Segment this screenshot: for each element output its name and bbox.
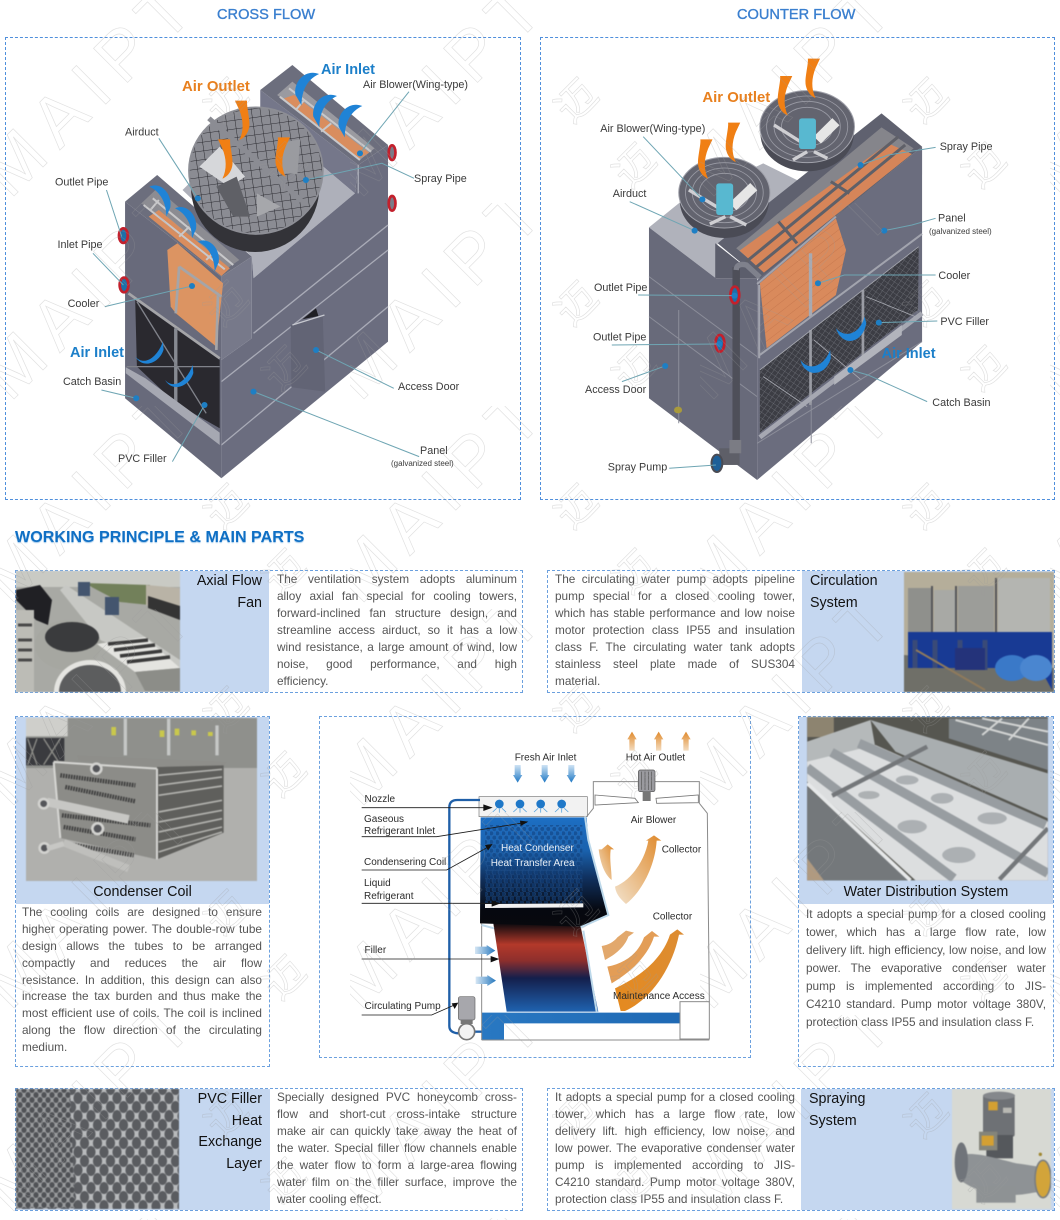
diagram: closed cooling tower cross-section — [362, 732, 710, 1040]
callout labels: counter flow: Airduct — [613, 188, 646, 200]
callout labels: cross flow: Catch Basin — [63, 376, 121, 388]
photo: axial flow fan — [15, 570, 181, 693]
text: circulation system: motor protection class IP55 and insulation — [555, 623, 795, 637]
panel: PVC filler heat exchange layer — [15, 1088, 523, 1211]
tower graphic — [362, 732, 709, 1040]
label background — [16, 1089, 270, 1210]
panel: condenser coil — [15, 716, 270, 1067]
text: circulation system: stainless steel plate made of SUS304 — [555, 657, 795, 671]
callout labels: cross flow: Panel — [420, 445, 448, 457]
callout labels: counter flow: Air Blower(Wing-type) — [600, 123, 705, 135]
text: axial flow fan — [277, 572, 517, 688]
diagram labels: Maintenance Access — [613, 991, 705, 1002]
callout labels: cross flow: Air Inlet — [321, 62, 375, 78]
tower body — [612, 59, 937, 480]
text: axial flow fan: streamline access airduct, so it has a low — [277, 623, 517, 637]
diagram labels: Liquid — [364, 878, 391, 889]
caption: circulation system: System — [810, 594, 858, 610]
caption: PVC filler: Heat — [232, 1112, 262, 1128]
text: water distribution system: It adopts a special pump for a closed cooling — [806, 907, 1046, 921]
text: spraying system: pump is implemented according to JIS- — [555, 1158, 795, 1172]
diagram labels: Circulating Pump — [364, 1001, 441, 1012]
text: spraying system — [555, 1090, 795, 1206]
callout labels: counter flow — [585, 90, 993, 474]
label background — [802, 571, 1054, 692]
diagram labels: Refrigerant — [364, 891, 414, 902]
text: PVC filler: water film on the filler surface, improve the — [277, 1175, 517, 1189]
text: axial flow fan: alloy axial fan special for cooling towers, — [277, 589, 517, 603]
panel: working principle diagram — [319, 716, 751, 1058]
text: axial flow fan: noise, good performance, and high — [277, 657, 517, 671]
text: spraying system: tower, which has a large flow rate, low — [555, 1107, 795, 1121]
text: PVC filler: flow and short-cut cross-intake structure — [277, 1107, 517, 1121]
diagram labels: Air Blower — [631, 815, 677, 826]
diagram labels: Hot Air Outlet — [626, 752, 685, 764]
caption: circulation system: Circulation — [810, 573, 878, 589]
text: circulation system: The circulating water pump adopts pipeline — [555, 572, 795, 586]
diagram labels: Gaseous — [364, 814, 404, 825]
callout labels: cross flow: PVC Filler — [118, 453, 167, 465]
caption: axial flow fan — [197, 573, 262, 610]
text: axial flow fan: efficiency. — [277, 674, 328, 688]
text: axial flow fan: The ventilation system adopts aluminum — [277, 572, 517, 586]
panel: spraying system — [547, 1088, 1055, 1211]
text: condenser coil: along the flow direction of the circulating — [22, 1023, 262, 1037]
text: spraying system: C4210 standard. Pump motor voltage 380V, — [555, 1175, 795, 1189]
caption: PVC filler — [198, 1091, 262, 1172]
callout labels: counter flow: Panel — [938, 212, 966, 224]
text: water distribution system: tower, which has a large flow rate, low — [806, 925, 1046, 939]
callout labels: cross flow: Access Door — [398, 381, 460, 393]
callout labels: cross flow: Outlet Pipe — [55, 176, 108, 188]
text: water distribution system: protection class IP55 and insulation class F. — [806, 1015, 1034, 1029]
text: condenser coil: medium. — [22, 1040, 67, 1054]
callout labels: counter flow: Outlet Pipe — [594, 282, 647, 294]
text: condenser coil: higher operating power. The double-row tube — [22, 922, 262, 936]
text: circulation system: class F. The circulating water tank adopts — [555, 640, 795, 654]
panel: axial flow fan — [15, 570, 523, 693]
label background — [801, 1089, 1054, 1210]
callout labels: cross flow: Spray Pipe — [414, 173, 467, 185]
panel: cross flow tower illustration — [55, 62, 468, 478]
text: condenser coil: design allows the tubes to be arranged — [22, 939, 262, 953]
text: water distribution system: power. The evaporative condenser water — [806, 961, 1046, 975]
text: PVC filler: the water. Special filler flow channels enable — [277, 1141, 517, 1155]
text: water distribution system: pump is implemented according to JIS- — [806, 979, 1046, 993]
text: axial flow fan: forward-inclined fan structure design, and — [277, 606, 517, 620]
photo: condenser coil — [25, 718, 258, 882]
panel: counter flow tower illustration — [585, 58, 993, 480]
text: spraying system: low power. The evaporative condenser water — [555, 1141, 795, 1155]
callout labels: counter flow: Spray Pump — [608, 462, 667, 474]
photo: PVC honeycomb filler — [15, 1088, 180, 1210]
text: condenser coil — [22, 905, 262, 1054]
callout labels: cross flow: (galvanized steel) — [391, 459, 454, 468]
callout labels: cross flow: Air Blower(Wing-type) — [363, 79, 468, 91]
text: circulation system: pump special for a closed cooling tower, — [555, 589, 795, 603]
text: condenser coil: The cooling coils are designed to ensure — [22, 905, 262, 919]
caption: water distribution system: Water Distribution System — [844, 884, 1008, 900]
text: water distribution system: C4210 standard. Pump motor voltage 380V, — [806, 997, 1046, 1011]
diagram labels: Fresh Air Inlet — [515, 752, 577, 764]
text: PVC filler: make air can quickly take away the heat of — [277, 1124, 517, 1138]
text: spraying system: It adopts a special pump for a closed cooling — [555, 1090, 795, 1104]
caption: spraying system: System — [809, 1112, 857, 1128]
diagram labels: Nozzle — [364, 794, 396, 805]
callout labels: counter flow: PVC Filler — [940, 316, 989, 328]
text: circulation system — [555, 572, 795, 688]
callout labels: counter flow: Access Door — [585, 384, 647, 396]
text: water distribution system: delivery lift. high efficiency, low noise, and low — [806, 943, 1046, 957]
callout labels: cross flow: Air Inlet — [70, 345, 124, 361]
panel: circulation system — [547, 570, 1055, 693]
tower body — [93, 65, 419, 478]
text: condenser coil: resistance. In addition, this design can also — [22, 973, 262, 987]
diagram labels: Filler — [364, 945, 387, 956]
text: circulation system: material. — [555, 674, 600, 688]
text: circulation system: which has stable performance and low noise — [555, 606, 795, 620]
diagram labels — [364, 752, 705, 1012]
callout labels: counter flow: Air Inlet — [882, 346, 936, 362]
callout labels: cross flow: Airduct — [125, 126, 159, 138]
callout labels: cross flow: Air Outlet — [182, 79, 250, 95]
text: condenser coil: most efficient use of coils. The coil is inclined — [22, 1006, 262, 1020]
callout labels: cross flow — [55, 62, 468, 468]
label background — [16, 717, 269, 904]
caption: axial flow fan: Axial Flow — [197, 573, 262, 589]
diagram labels: Collector — [662, 844, 702, 856]
heading: counter flow: COUNTER FLOW — [737, 7, 855, 23]
caption: PVC filler: Layer — [226, 1156, 262, 1172]
callout labels: counter flow: Spray Pipe — [940, 141, 993, 153]
panel border: cross flow — [5, 37, 521, 500]
callout labels: counter flow: Catch Basin — [932, 397, 991, 409]
text: PVC filler — [277, 1090, 518, 1206]
photo: circulation system — [903, 572, 1055, 693]
text: condenser coil: increase the tax burden and thus make the — [22, 989, 262, 1003]
caption: circulation system — [810, 573, 878, 610]
caption: axial flow fan: Fan — [237, 594, 262, 610]
caption: spraying system — [809, 1091, 865, 1128]
caption: condenser coil: Condenser Coil — [93, 884, 192, 900]
label background — [799, 717, 1053, 904]
panel border: counter flow — [540, 37, 1055, 500]
diagram labels: Condensering Coil — [364, 857, 446, 868]
caption: spraying system: Spraying — [809, 1091, 865, 1107]
text: spraying system: delivery lift. high efficiency, low noise, and — [555, 1124, 795, 1138]
callout labels: counter flow: Cooler — [938, 270, 971, 282]
label background — [16, 571, 269, 692]
text: PVC filler: Specially designed PVC honeycomb cross- — [277, 1090, 517, 1104]
text: condenser coil: compactly and reduces the air flow — [22, 956, 262, 970]
diagram labels: Collector — [653, 912, 693, 922]
text: axial flow fan: wind resistance, a large amount of wind, low — [277, 640, 517, 654]
section heading: WORKING PRINCIPLE & MAIN PARTS — [15, 528, 304, 546]
photo: water distribution system — [806, 716, 1049, 882]
diagram labels: Heat Condenser — [501, 843, 574, 854]
diagram labels: Refrigerant Inlet — [364, 826, 435, 837]
diagram labels: Heat Transfer Area — [491, 858, 575, 869]
caption: PVC filler: Exchange — [198, 1134, 262, 1150]
text: PVC filler: water cooling effect. — [277, 1192, 382, 1206]
text: water distribution system — [806, 907, 1046, 1029]
photo: centrifugal pump — [952, 1088, 1052, 1210]
heading: cross flow: CROSS FLOW — [217, 7, 315, 23]
caption: PVC filler: PVC Filler — [198, 1091, 262, 1107]
callout labels: counter flow: Outlet Pipe — [593, 332, 646, 344]
text: PVC filler: the water flow to form a large-area flowing — [277, 1158, 517, 1172]
panel: water distribution system — [798, 716, 1054, 1067]
callout labels: cross flow: Cooler — [68, 298, 100, 310]
callout labels: cross flow: Inlet Pipe — [58, 239, 103, 251]
callout labels: counter flow: (galvanized steel) — [929, 227, 992, 236]
text: spraying system: protection class IP55 and insulation class F. — [555, 1192, 783, 1206]
callout labels: counter flow: Air Outlet — [702, 90, 770, 106]
